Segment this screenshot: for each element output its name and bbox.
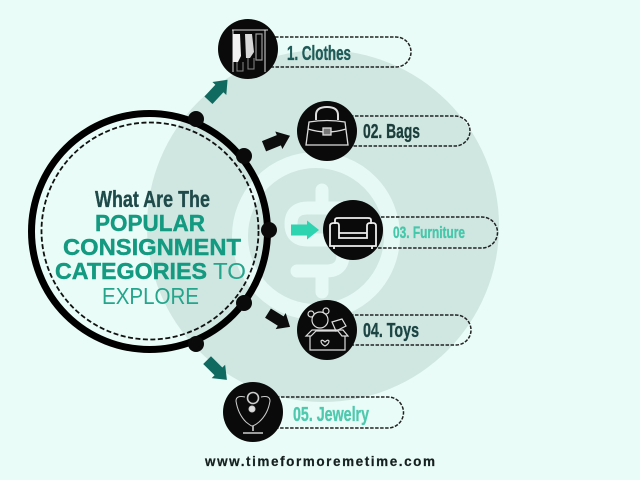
label: 05. Jewelry <box>293 404 370 426</box>
arrow: to furniture <box>291 220 319 240</box>
title: EXPLORE <box>102 283 199 309</box>
title <box>55 186 246 309</box>
title: POPULAR <box>95 210 205 236</box>
title: What Are The <box>95 186 210 212</box>
item 5: jewelry <box>223 382 404 442</box>
arrow: to clothes <box>202 73 234 107</box>
title: CATEGORIES <box>55 258 207 284</box>
icon: clothes rack <box>232 30 268 72</box>
arrow: to jewelry <box>200 353 234 387</box>
label: 1. Clothes <box>287 43 351 65</box>
icon: toy box <box>306 308 348 350</box>
arrow: to toys <box>263 305 295 335</box>
item 4: toys <box>297 300 471 360</box>
label: 03. Furniture <box>393 223 465 242</box>
label: 02. Bags <box>363 121 420 143</box>
icon: sofa <box>330 218 376 249</box>
icon: handbag <box>306 107 348 145</box>
item 2: bags <box>297 101 470 161</box>
title: CONSIGNMENT <box>63 234 241 260</box>
label: 04. Toys <box>363 320 419 342</box>
item 3: furniture <box>323 200 497 260</box>
icon: necklace bust <box>236 392 270 433</box>
item 1: clothes <box>218 19 411 79</box>
main circle <box>32 111 277 352</box>
website url: www.timeformoremetime.com <box>204 454 435 469</box>
background dollar coin <box>147 50 499 402</box>
arrow: to bags <box>260 127 294 155</box>
title: TO <box>213 258 246 284</box>
